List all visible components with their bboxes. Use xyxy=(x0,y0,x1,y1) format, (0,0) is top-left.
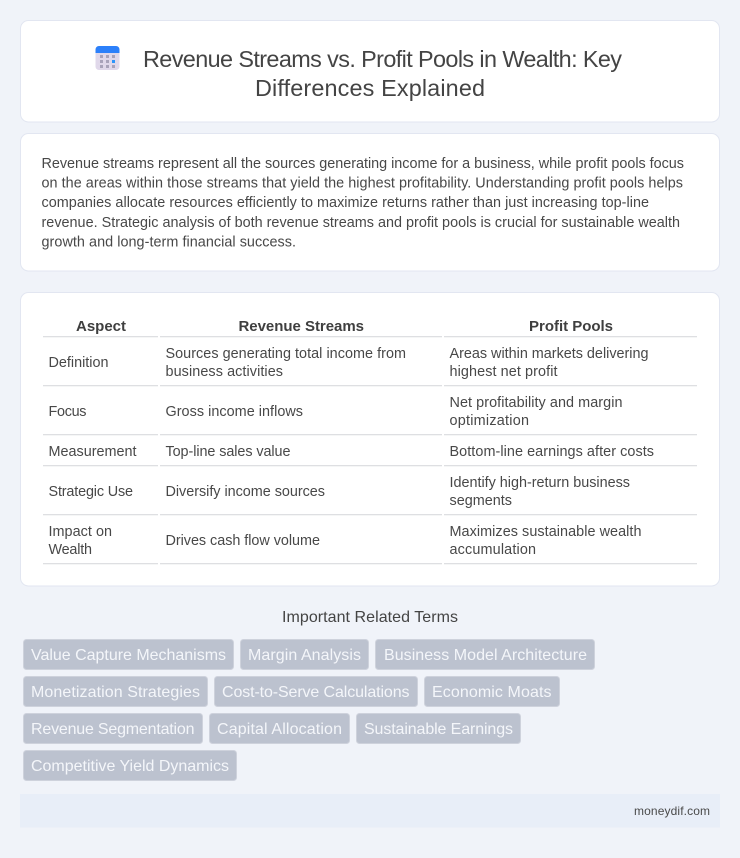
table row: impact on wealth xyxy=(48,524,642,558)
table row: focus: optimization xyxy=(450,413,529,429)
table row: strategic use xyxy=(48,475,630,509)
table row: definition: business activities xyxy=(166,364,283,380)
table row: focus: Gross income inflows xyxy=(166,404,303,420)
table row: focus: Net profitability and margin xyxy=(450,395,622,411)
chip: Monetization Strategies xyxy=(31,684,200,701)
chip: Competitive Yield Dynamics xyxy=(31,758,229,775)
table row: impact on wealth: Wealth xyxy=(48,542,92,558)
summary text: Revenue streams represent all the sources generating income for a business, while profit pools focus xyxy=(42,156,684,172)
title: Differences Explained xyxy=(255,75,485,101)
footer: moneydif.com xyxy=(634,804,710,818)
table row: focus xyxy=(48,395,622,429)
table row: strategic use: Diversify income sources xyxy=(166,484,325,500)
table row: impact on wealth: accumulation xyxy=(450,542,536,558)
summary text: companies allocate resources efficiently to maximize returns rather than just increasing top-line xyxy=(42,195,649,211)
chip: Revenue Segmentation xyxy=(31,721,194,738)
table row: definition xyxy=(48,346,648,380)
chip xyxy=(356,714,520,744)
chip: Economic Moats xyxy=(432,684,552,701)
summary text: revenue. Strategic analysis of both revenue streams and profit pools is crucial for sustainable wealth xyxy=(42,215,680,231)
chip: Value Capture Mechanisms xyxy=(31,647,226,664)
title: Revenue Streams vs. Profit Pools in Wealth: Key xyxy=(143,46,622,72)
table header: Profit Pools xyxy=(529,318,613,335)
table row: measurement: Top-line sales value xyxy=(166,444,290,460)
icon: calendar xyxy=(96,46,120,70)
table row: measurement: Measurement xyxy=(48,444,136,460)
chip xyxy=(24,640,234,670)
summary text: on the areas within those streams that yield the highest profitability. Understanding profit pools helps xyxy=(42,176,683,192)
table row: impact on wealth: Maximizes sustainable wealth xyxy=(450,524,642,540)
panel: title header xyxy=(20,20,720,122)
panel: summary paragraph xyxy=(20,134,720,271)
chip xyxy=(24,750,236,780)
related terms chips xyxy=(24,640,594,780)
table row: measurement xyxy=(48,444,654,460)
table row: measurement: Bottom-line earnings after costs xyxy=(450,444,654,460)
table row: strategic use: Strategic Use xyxy=(48,484,133,500)
heading: important related terms: Important Related Terms xyxy=(282,609,458,626)
table row: impact on wealth: Impact on xyxy=(48,524,112,540)
chip xyxy=(376,640,594,670)
chip xyxy=(24,676,208,706)
chip: Cost-to-Serve Calculations xyxy=(222,684,410,701)
title xyxy=(143,46,622,101)
table row: definition: Areas within markets delivering xyxy=(450,346,648,362)
table row: strategic use: Identify high-return business xyxy=(450,475,630,491)
table row: definition: Definition xyxy=(48,355,108,371)
chip: Capital Allocation xyxy=(217,721,342,738)
chip xyxy=(240,640,368,670)
table row: definition: highest net profit xyxy=(450,364,558,380)
table row: definition: Sources generating total income from xyxy=(166,346,406,362)
chip xyxy=(24,714,202,744)
chip: Margin Analysis xyxy=(248,647,361,664)
chip xyxy=(210,714,350,744)
chip xyxy=(424,676,560,706)
summary text: growth and long-term financial success. xyxy=(42,234,296,250)
table header xyxy=(76,318,613,335)
chip: Sustainable Earnings xyxy=(364,721,513,738)
footer xyxy=(20,794,720,828)
chip: Business Model Architecture xyxy=(384,647,587,664)
table row: impact on wealth: Drives cash flow volume xyxy=(166,533,320,549)
panel: comparison table xyxy=(20,292,720,586)
table row: focus: Focus xyxy=(48,404,86,420)
chip xyxy=(214,676,418,706)
table header: Aspect xyxy=(76,318,126,335)
table header: Revenue Streams xyxy=(238,318,364,335)
table row: strategic use: segments xyxy=(450,493,512,509)
summary text xyxy=(42,156,684,250)
